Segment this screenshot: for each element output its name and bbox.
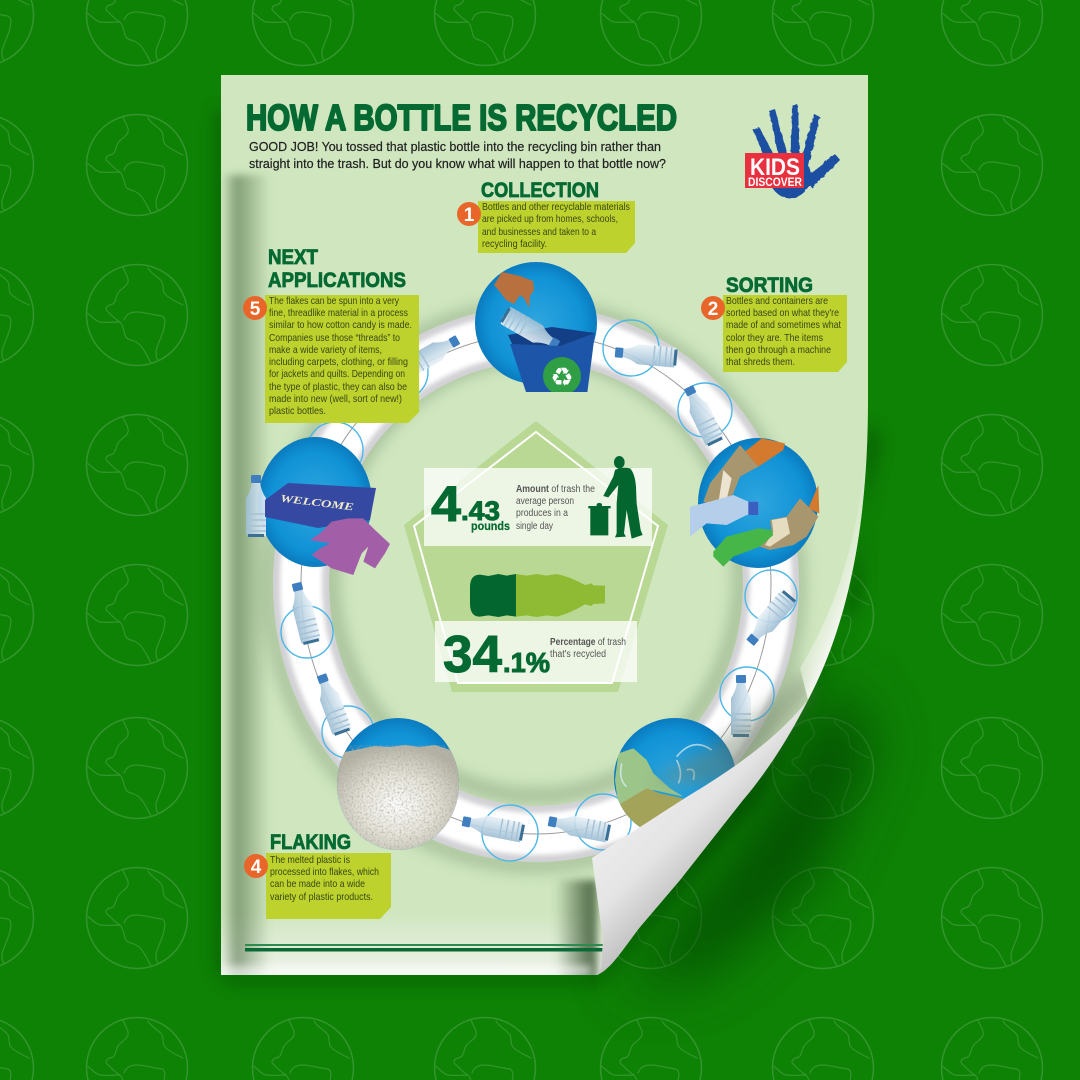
stats pentagon <box>404 421 668 692</box>
footer rule <box>245 944 607 952</box>
bubble: melting <box>614 718 736 838</box>
bubble: next applications <box>246 437 390 575</box>
panel: next applications: fine, threadlike material in a process <box>269 308 408 319</box>
panel: sorting: made of and sometimes what <box>726 320 841 331</box>
panel: next applications: plastic bottles. <box>269 406 326 417</box>
bubble: collection <box>475 262 597 395</box>
stat: percentage recycled: that's recycled <box>550 649 606 660</box>
panel: next applications: Companies use those “threads” to <box>269 333 400 344</box>
icon: two-tone bottle <box>470 574 605 617</box>
panel: next applications: for jackets and quilts. Depending on <box>269 369 405 380</box>
panel: flaking: processed into flakes, which <box>270 867 379 878</box>
icon: purple jacket <box>310 518 390 575</box>
panel: flaking: variety of plastic products. <box>270 892 373 903</box>
ring bottles and circles <box>281 320 798 861</box>
panel: next applications: made into new (well, sort of new!) <box>269 394 402 405</box>
icon: hand <box>494 272 534 308</box>
panel: next applications <box>243 246 419 423</box>
stat: percentage recycled: Percentage of trash <box>550 637 626 648</box>
logo: Kids Discover hand: DISCOVER <box>748 175 802 189</box>
panel: next applications: NEXT <box>268 246 318 269</box>
panel: collection: 1 <box>464 205 475 226</box>
panel: flaking: 4 <box>251 857 262 878</box>
title: HOW A BOTTLE IS RECYCLED <box>246 97 677 138</box>
panel: flaking: can be made into a wide <box>270 879 365 890</box>
stat: amount of trash: pounds <box>471 519 510 533</box>
panel: sorting: SORTING <box>726 274 813 297</box>
page curl <box>592 400 868 975</box>
panel: flaking <box>244 831 391 919</box>
intro text: straight into the trash. But do you know what will happen to that bottle now? <box>249 157 666 171</box>
page sheet <box>221 75 871 980</box>
panel: sorting: then go through a machine <box>726 345 831 356</box>
recycling loop ring <box>301 334 771 834</box>
panel: sorting <box>701 274 847 372</box>
intro text: GOOD JOB! You tossed that plastic bottle into the recycling bin rather than <box>249 140 661 154</box>
stat: amount of trash: single day <box>516 521 553 532</box>
panel: next applications: similar to how cotton candy is made. <box>269 320 412 331</box>
panel: next applications: 5 <box>250 299 261 320</box>
panel: collection: and businesses and taken to a <box>482 227 596 238</box>
panel: next applications: the type of plastic, they can also be <box>269 382 407 393</box>
panel: collection: COLLECTION <box>481 179 599 202</box>
panel: sorting: 2 <box>708 299 718 320</box>
panel: sorting: sorted based on what they're <box>726 308 839 319</box>
ring shadow <box>270 307 798 865</box>
stat: amount of trash: .43 <box>461 496 500 526</box>
icon: blue recycling bin: ♻ <box>550 363 574 393</box>
intro text <box>249 140 666 171</box>
panel: next applications: APPLICATIONS <box>268 269 406 292</box>
stat: amount of trash: 4 <box>431 476 461 532</box>
panel: next applications: make a wide variety of items, <box>269 345 382 356</box>
page drop shadow <box>216 110 880 985</box>
stat: amount of trash <box>424 468 652 546</box>
logo: Kids Discover hand <box>745 105 840 198</box>
panel: flaking: FLAKING <box>270 831 351 854</box>
panel: sorting: color they are. The items <box>726 333 823 344</box>
stat: amount of trash: Amount of trash the <box>516 484 595 495</box>
bubble: flaking <box>337 718 459 850</box>
panel: next applications: The flakes can be spun into a very <box>269 296 400 307</box>
bubble: sorting <box>690 438 819 568</box>
stat: percentage recycled: .1% <box>503 647 550 678</box>
panel: next applications: including carpets, clothing, or filling <box>269 357 408 368</box>
panel: flaking: The melted plastic is <box>270 855 350 866</box>
panel: sorting: that shreds them. <box>726 357 795 368</box>
panel: collection: recycling facility. <box>482 239 547 250</box>
logo: Kids Discover hand: KIDS <box>750 154 800 181</box>
panel: collection: are picked up from homes, schools, <box>482 214 618 225</box>
icon: welcome mat: WELCOME <box>280 494 354 513</box>
panel: sorting: Bottles and containers are <box>726 296 828 307</box>
icon: person dropping trash into can <box>588 456 643 539</box>
panel: collection: Bottles and other recyclable materials <box>482 202 630 213</box>
stat: percentage recycled <box>435 621 637 684</box>
stat: percentage recycled: 34 <box>443 626 502 684</box>
stat: amount of trash: produces in a <box>516 508 568 519</box>
icon: welcome mat <box>265 483 376 528</box>
stat: amount of trash: average person <box>516 496 574 507</box>
panel: collection <box>457 179 635 253</box>
